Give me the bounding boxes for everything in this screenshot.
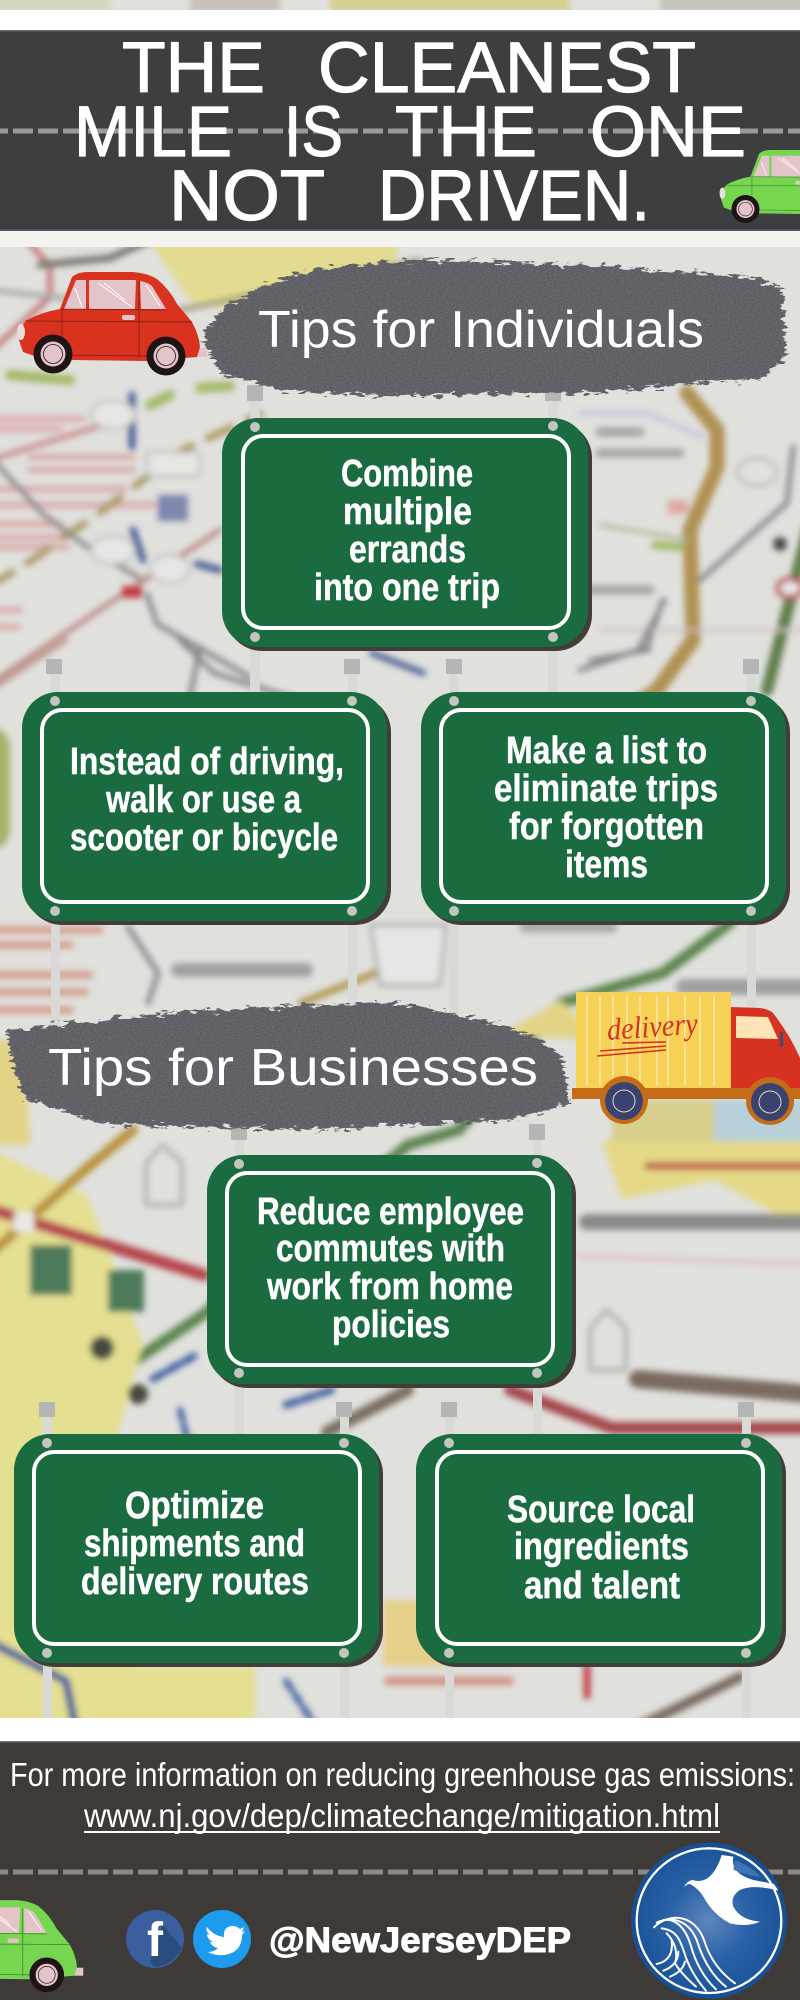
sign: walk or bike: Instead of driving, bbox=[70, 741, 344, 783]
sign: make a list: Make a list to bbox=[506, 730, 707, 772]
icon: facebook: f bbox=[147, 1914, 164, 1967]
sign: reduce commutes: Reduce employee bbox=[257, 1191, 524, 1233]
brush heading: Tips for Individuals bbox=[204, 260, 786, 396]
sign: reduce commutes: commutes with bbox=[276, 1228, 505, 1270]
sign: combine errands: into one trip bbox=[314, 567, 500, 609]
sign posts bbox=[39, 385, 759, 1718]
footer link: www.nj.gov/dep/climatechange/mitigation.html bbox=[83, 1797, 720, 1834]
header panel bbox=[0, 29, 800, 236]
title: ONE bbox=[590, 93, 746, 172]
sign: make a list: for forgotten bbox=[509, 806, 704, 848]
sign: source local: Source local bbox=[507, 1489, 695, 1531]
sign: optimize routes: delivery routes bbox=[81, 1561, 309, 1603]
sign: combine errands: errands bbox=[349, 529, 466, 571]
top white band bbox=[0, 10, 800, 30]
footer panel bbox=[0, 1741, 800, 2000]
sign: source local: and talent bbox=[524, 1565, 680, 1607]
brush heading: Tips for Individuals: Tips for Individuals bbox=[258, 301, 704, 359]
title: MILE bbox=[74, 93, 232, 172]
sign: source local: ingredients bbox=[514, 1526, 689, 1568]
sign: make a list: items bbox=[565, 844, 648, 886]
brush heading: Tips for Businesses bbox=[6, 1002, 570, 1130]
title: CLEANEST bbox=[318, 29, 696, 108]
bottom white band bbox=[0, 1718, 800, 1741]
icon: green car footer bbox=[0, 1900, 83, 1992]
title: NOT bbox=[169, 157, 325, 236]
icon: twitter bbox=[193, 1910, 251, 1968]
sign: make a list bbox=[421, 692, 790, 925]
sign: walk or bike: scooter or bicycle bbox=[70, 817, 338, 859]
title: THE bbox=[122, 29, 265, 108]
sign: make a list: eliminate trips bbox=[494, 768, 718, 810]
lower white band bbox=[0, 231, 800, 247]
title bbox=[74, 29, 746, 236]
sign: reduce commutes bbox=[207, 1155, 576, 1388]
sign: optimize routes: Optimize bbox=[125, 1485, 264, 1527]
sign: reduce commutes: policies bbox=[332, 1304, 450, 1346]
title: THE bbox=[395, 93, 537, 172]
sign: combine errands: multiple bbox=[343, 491, 472, 533]
icon: facebook bbox=[126, 1910, 184, 1968]
sign: optimize routes: shipments and bbox=[84, 1523, 305, 1565]
icon: NJDEP logo bbox=[631, 1843, 787, 1999]
icon: delivery truck bbox=[572, 992, 800, 1125]
social handle: @NewJerseyDEP bbox=[269, 1921, 571, 1960]
title: IS bbox=[284, 93, 343, 172]
sign: combine errands bbox=[222, 418, 592, 651]
sign: combine errands: Combine bbox=[341, 453, 473, 495]
title: DRIVEN. bbox=[378, 157, 650, 236]
brush heading: Tips for Businesses: Tips for Businesses bbox=[48, 1039, 538, 1097]
sign: reduce commutes: work from home bbox=[266, 1266, 513, 1308]
sign: optimize routes bbox=[14, 1434, 383, 1667]
sign: walk or bike: walk or use a bbox=[105, 779, 302, 821]
sign: source local bbox=[416, 1434, 786, 1667]
icon: green car header bbox=[720, 150, 800, 225]
sign: walk or bike bbox=[22, 692, 391, 925]
delivery lettering: delivery bbox=[606, 1006, 699, 1047]
icon: red car bbox=[17, 272, 207, 376]
